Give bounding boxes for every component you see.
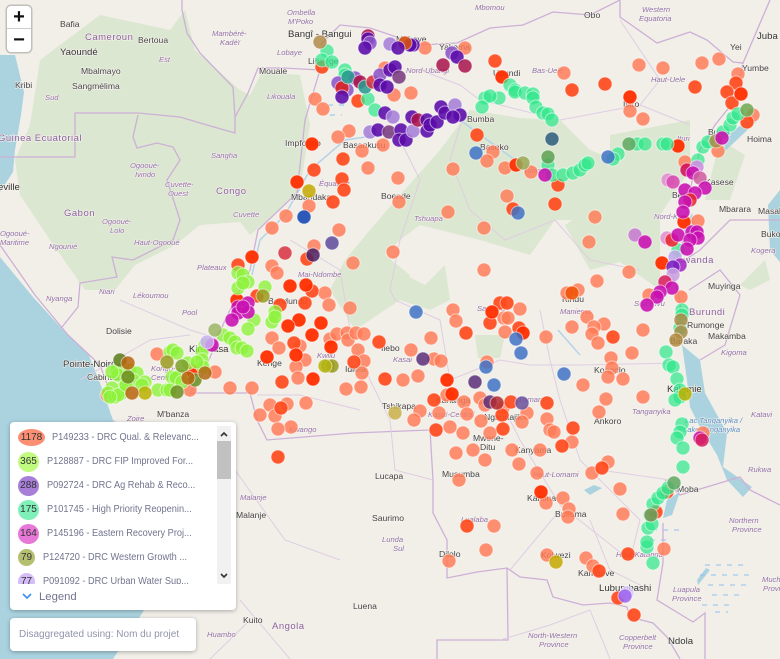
place labels: Tshuapa xyxy=(414,214,443,223)
place labels: Isiro xyxy=(623,99,639,109)
place labels: Kigoma xyxy=(721,348,747,357)
place labels: Province xyxy=(539,640,569,649)
place labels: Kenge xyxy=(257,358,282,368)
place labels: Ivindo xyxy=(135,170,155,179)
panel: disaggregation note xyxy=(10,618,196,651)
place labels: Ogooué- xyxy=(102,217,132,226)
legend item 365 xyxy=(18,452,193,472)
place labels: Kribi xyxy=(15,80,32,90)
place labels: Équateur xyxy=(319,179,350,188)
legend item 164: P145196 - Eastern Recovery Proj... xyxy=(47,528,192,539)
markers: P101745 mint xyxy=(315,44,745,570)
legend item 365: P128887 - DRC FIP Improved For... xyxy=(47,456,193,467)
place labels: Congo xyxy=(216,186,246,197)
place labels: Ombella xyxy=(287,8,315,17)
place labels: Tshikapa xyxy=(382,401,416,411)
place labels: Kambove xyxy=(578,568,615,578)
zoom in button xyxy=(7,6,31,29)
place labels: Mbarara xyxy=(719,204,751,214)
place labels: Mwene- xyxy=(473,433,504,443)
place labels: Basankusu xyxy=(343,140,386,150)
place labels: North-Western xyxy=(528,631,577,640)
place labels: Angola xyxy=(272,621,305,632)
place labels: Maritime xyxy=(0,238,29,247)
legend toggle xyxy=(22,591,77,603)
place labels: Kadéï xyxy=(220,38,241,47)
place labels: Lolo xyxy=(110,226,124,235)
sea xyxy=(0,55,150,659)
place labels: Kongolo xyxy=(594,365,626,375)
place labels: Mouale xyxy=(259,66,287,76)
place labels: Haut-Katanga xyxy=(616,550,663,559)
place labels: Lomami xyxy=(519,395,546,404)
legend item 164: 164 xyxy=(20,528,37,539)
place labels: Huambo xyxy=(207,630,236,639)
place labels: Kwango xyxy=(289,425,316,434)
place labels: Kogera xyxy=(751,246,776,255)
panel: disaggregation note: Disaggregated using: Nom du projet xyxy=(19,629,179,640)
scrollbar xyxy=(217,426,231,584)
scroll up arrow xyxy=(220,432,228,437)
legend label: Legend xyxy=(39,591,77,603)
place labels: Lobaye xyxy=(277,48,302,57)
place labels: Yanonge xyxy=(523,166,553,175)
place labels: Burundi xyxy=(689,307,725,318)
place labels: Rwanda xyxy=(676,255,714,266)
zoom control xyxy=(7,6,31,52)
legend item 1178 xyxy=(18,429,199,446)
place labels: Lake Tanganyika xyxy=(683,425,740,434)
place labels: Congo xyxy=(161,420,187,430)
place labels: Tanganyika xyxy=(632,407,671,416)
place labels: Kwilu xyxy=(317,351,336,360)
place labels: Maniema xyxy=(560,307,591,316)
zoom out button: − xyxy=(13,29,25,51)
place labels: Lékoumou xyxy=(133,291,169,300)
place labels: Rukwa xyxy=(748,465,771,474)
legend item 79: P124720 - DRC Western Growth ... xyxy=(43,552,187,563)
place labels: Bandundu xyxy=(268,296,307,306)
legend item 175 xyxy=(18,500,192,520)
province borders xyxy=(80,20,690,659)
place labels: Plateaux xyxy=(197,263,228,272)
place labels: Bafia xyxy=(60,19,80,29)
place labels: Libenge xyxy=(308,56,339,66)
place labels: Nord-Ubangi xyxy=(406,66,449,75)
place labels: Haut-Uele xyxy=(651,75,685,84)
place labels: Province xyxy=(623,642,653,651)
place labels: Kanyama xyxy=(515,445,552,455)
place labels: Ogooué- xyxy=(0,229,30,238)
place labels: Saurimo xyxy=(372,513,404,523)
legend item 77 xyxy=(18,573,189,584)
place labels: Central xyxy=(151,373,176,382)
place labels: Haut-Ogooué xyxy=(134,238,180,247)
legend item 79 xyxy=(18,549,187,566)
zoom in button: + xyxy=(13,6,25,28)
place labels: Equatoria xyxy=(639,14,672,23)
legend list xyxy=(18,429,199,584)
place labels: Mobaye xyxy=(396,34,427,44)
place labels: Impfondo xyxy=(285,138,321,148)
place labels: Bumba xyxy=(467,114,494,124)
place labels: Ituri xyxy=(677,134,690,143)
markers: strong red series xyxy=(185,70,748,499)
place labels: Kinshasa xyxy=(189,344,229,355)
legend item 1178: P149233 - DRC Qual. & Relevanc... xyxy=(52,432,199,443)
place labels: Lualaba xyxy=(461,515,488,524)
place labels: Ogooué- xyxy=(130,161,160,170)
place labels: Likouala xyxy=(267,92,295,101)
lakes xyxy=(584,120,780,585)
place labels: Ilebo xyxy=(381,343,400,353)
place labels: Hoima xyxy=(747,134,772,144)
place labels: Obo xyxy=(584,10,600,20)
panel: legend xyxy=(10,422,236,610)
place labels: Province xyxy=(732,525,762,534)
place labels: Makamba xyxy=(708,331,746,341)
place labels: Sangmélima xyxy=(72,81,120,91)
place labels: Yaoundé xyxy=(60,47,98,58)
place labels: Baraka xyxy=(670,336,697,346)
place labels: Moba xyxy=(677,484,699,494)
place labels: Bas-Uele xyxy=(532,66,563,75)
place labels: Sul xyxy=(393,544,404,553)
place labels: Ouest xyxy=(168,189,189,198)
place labels: Juba xyxy=(757,31,778,42)
place labels: Musumba xyxy=(442,469,480,479)
place labels: Basoko xyxy=(480,142,509,152)
legend item 175: 175 xyxy=(20,504,37,515)
place labels: Idiofa xyxy=(345,364,366,374)
place labels: Bangî - Bangui xyxy=(288,29,351,40)
place labels: Province xyxy=(672,594,702,603)
place labels: Lac Tanganyika / xyxy=(685,416,743,425)
legend item 288: 288 xyxy=(20,480,37,491)
place labels: Kasese xyxy=(705,177,734,187)
place labels: Pointe-Noire xyxy=(63,359,116,370)
place labels: Muyinga xyxy=(708,281,741,291)
place labels: Yumbe xyxy=(742,63,769,73)
place labels: Dolisie xyxy=(106,326,132,336)
place labels: Malanje xyxy=(236,510,266,520)
place labels: Western xyxy=(642,5,670,14)
place labels: Kasai xyxy=(393,355,412,364)
place labels: Mbandaka xyxy=(291,192,331,202)
place labels: Ngandajika xyxy=(484,412,527,422)
place labels: Katavi xyxy=(751,410,772,419)
place labels: Kasaï-Central xyxy=(428,410,475,419)
legend item 288 xyxy=(18,476,195,496)
place labels: Ankoro xyxy=(594,416,621,426)
legend item 164 xyxy=(18,524,192,544)
place labels: Yakoma xyxy=(439,42,470,52)
place labels: Sud-Kivu xyxy=(634,299,666,308)
place labels: Ngounié xyxy=(49,242,77,251)
place labels: Zoire xyxy=(126,414,144,423)
place labels: Haut-Lomami xyxy=(533,470,579,479)
markers: red series xyxy=(231,54,754,622)
place labels: Est xyxy=(159,55,171,64)
place labels: Luena xyxy=(353,601,377,611)
place labels: Malanje xyxy=(240,493,267,502)
markers: P128887 lime xyxy=(101,266,282,404)
place labels: Cabinda xyxy=(87,372,119,382)
place labels: Nord-Kivu xyxy=(654,212,689,221)
place labels: Bukama xyxy=(555,509,587,519)
place labels: Cuvette- xyxy=(165,180,194,189)
place labels: Copperbelt xyxy=(619,633,657,642)
place labels: Yei xyxy=(730,42,742,52)
legend item 79: 79 xyxy=(21,552,32,563)
rivers xyxy=(252,120,580,355)
place labels: Luapula xyxy=(673,585,700,594)
legend item 365: 365 xyxy=(20,456,37,467)
place labels: Lucapa xyxy=(375,471,403,481)
place labels: Sankuru xyxy=(477,304,506,313)
legend item 288: P092724 - DRC Ag Rehab & Reco... xyxy=(47,480,195,491)
place labels: Guinea Ecuatorial xyxy=(0,133,82,144)
place labels: M'Poko xyxy=(288,17,313,26)
place labels: Nyanga xyxy=(46,294,72,303)
wetlands xyxy=(328,105,755,612)
place labels: Beni xyxy=(672,190,689,200)
place labels: Niari xyxy=(99,287,115,296)
place labels: Bunia xyxy=(708,127,730,137)
place labels: Northern xyxy=(729,516,759,525)
place labels: Pool xyxy=(182,308,198,317)
place labels: Kamina xyxy=(527,493,556,503)
place labels: M'banza xyxy=(157,409,189,419)
markers: blue and other series xyxy=(200,58,634,603)
scroll down arrow xyxy=(220,573,228,578)
place labels: Bertoua xyxy=(138,35,168,45)
scrollbar thumb xyxy=(217,441,231,479)
place labels: Kongo- xyxy=(151,364,176,373)
place labels: Mambéré- xyxy=(212,29,247,38)
place labels: Lubumbashi xyxy=(599,583,651,594)
place labels: Mbalmayo xyxy=(81,66,121,76)
place labels: Dilolo xyxy=(439,549,461,559)
place labels: Ubundi xyxy=(493,68,520,78)
place labels: Sangha xyxy=(211,151,237,160)
place labels: Kuito xyxy=(243,615,263,625)
markers: P124720 olive and brown xyxy=(113,35,754,569)
markers: P145196 magenta xyxy=(205,131,729,447)
place labels: Kolwezi xyxy=(541,550,571,560)
place labels: Mai-Ndombe xyxy=(298,270,341,279)
chevron icon xyxy=(22,593,32,599)
place labels: Kananga xyxy=(436,395,471,405)
place labels: Boende xyxy=(381,191,411,201)
place labels: Cuvette xyxy=(233,210,259,219)
legend item 1178: 1178 xyxy=(21,432,42,443)
place labels: Rumonge xyxy=(687,320,724,330)
place labels: Lunda xyxy=(382,535,403,544)
place labels: Gabon xyxy=(64,208,95,219)
place labels: Ditu xyxy=(480,442,496,452)
place labels: Kalemie xyxy=(667,384,702,395)
markers: P092724 purple xyxy=(331,29,467,147)
place labels: Ndola xyxy=(668,636,694,647)
place labels: Kindu xyxy=(562,294,584,304)
place labels: Sud xyxy=(45,93,59,102)
place labels: Mbomou xyxy=(475,3,505,12)
markers: P149233 salmon xyxy=(100,41,760,573)
place labels: Cameroun xyxy=(85,32,133,43)
legend item 175: P101745 - High Priority Reopenin... xyxy=(47,504,192,515)
